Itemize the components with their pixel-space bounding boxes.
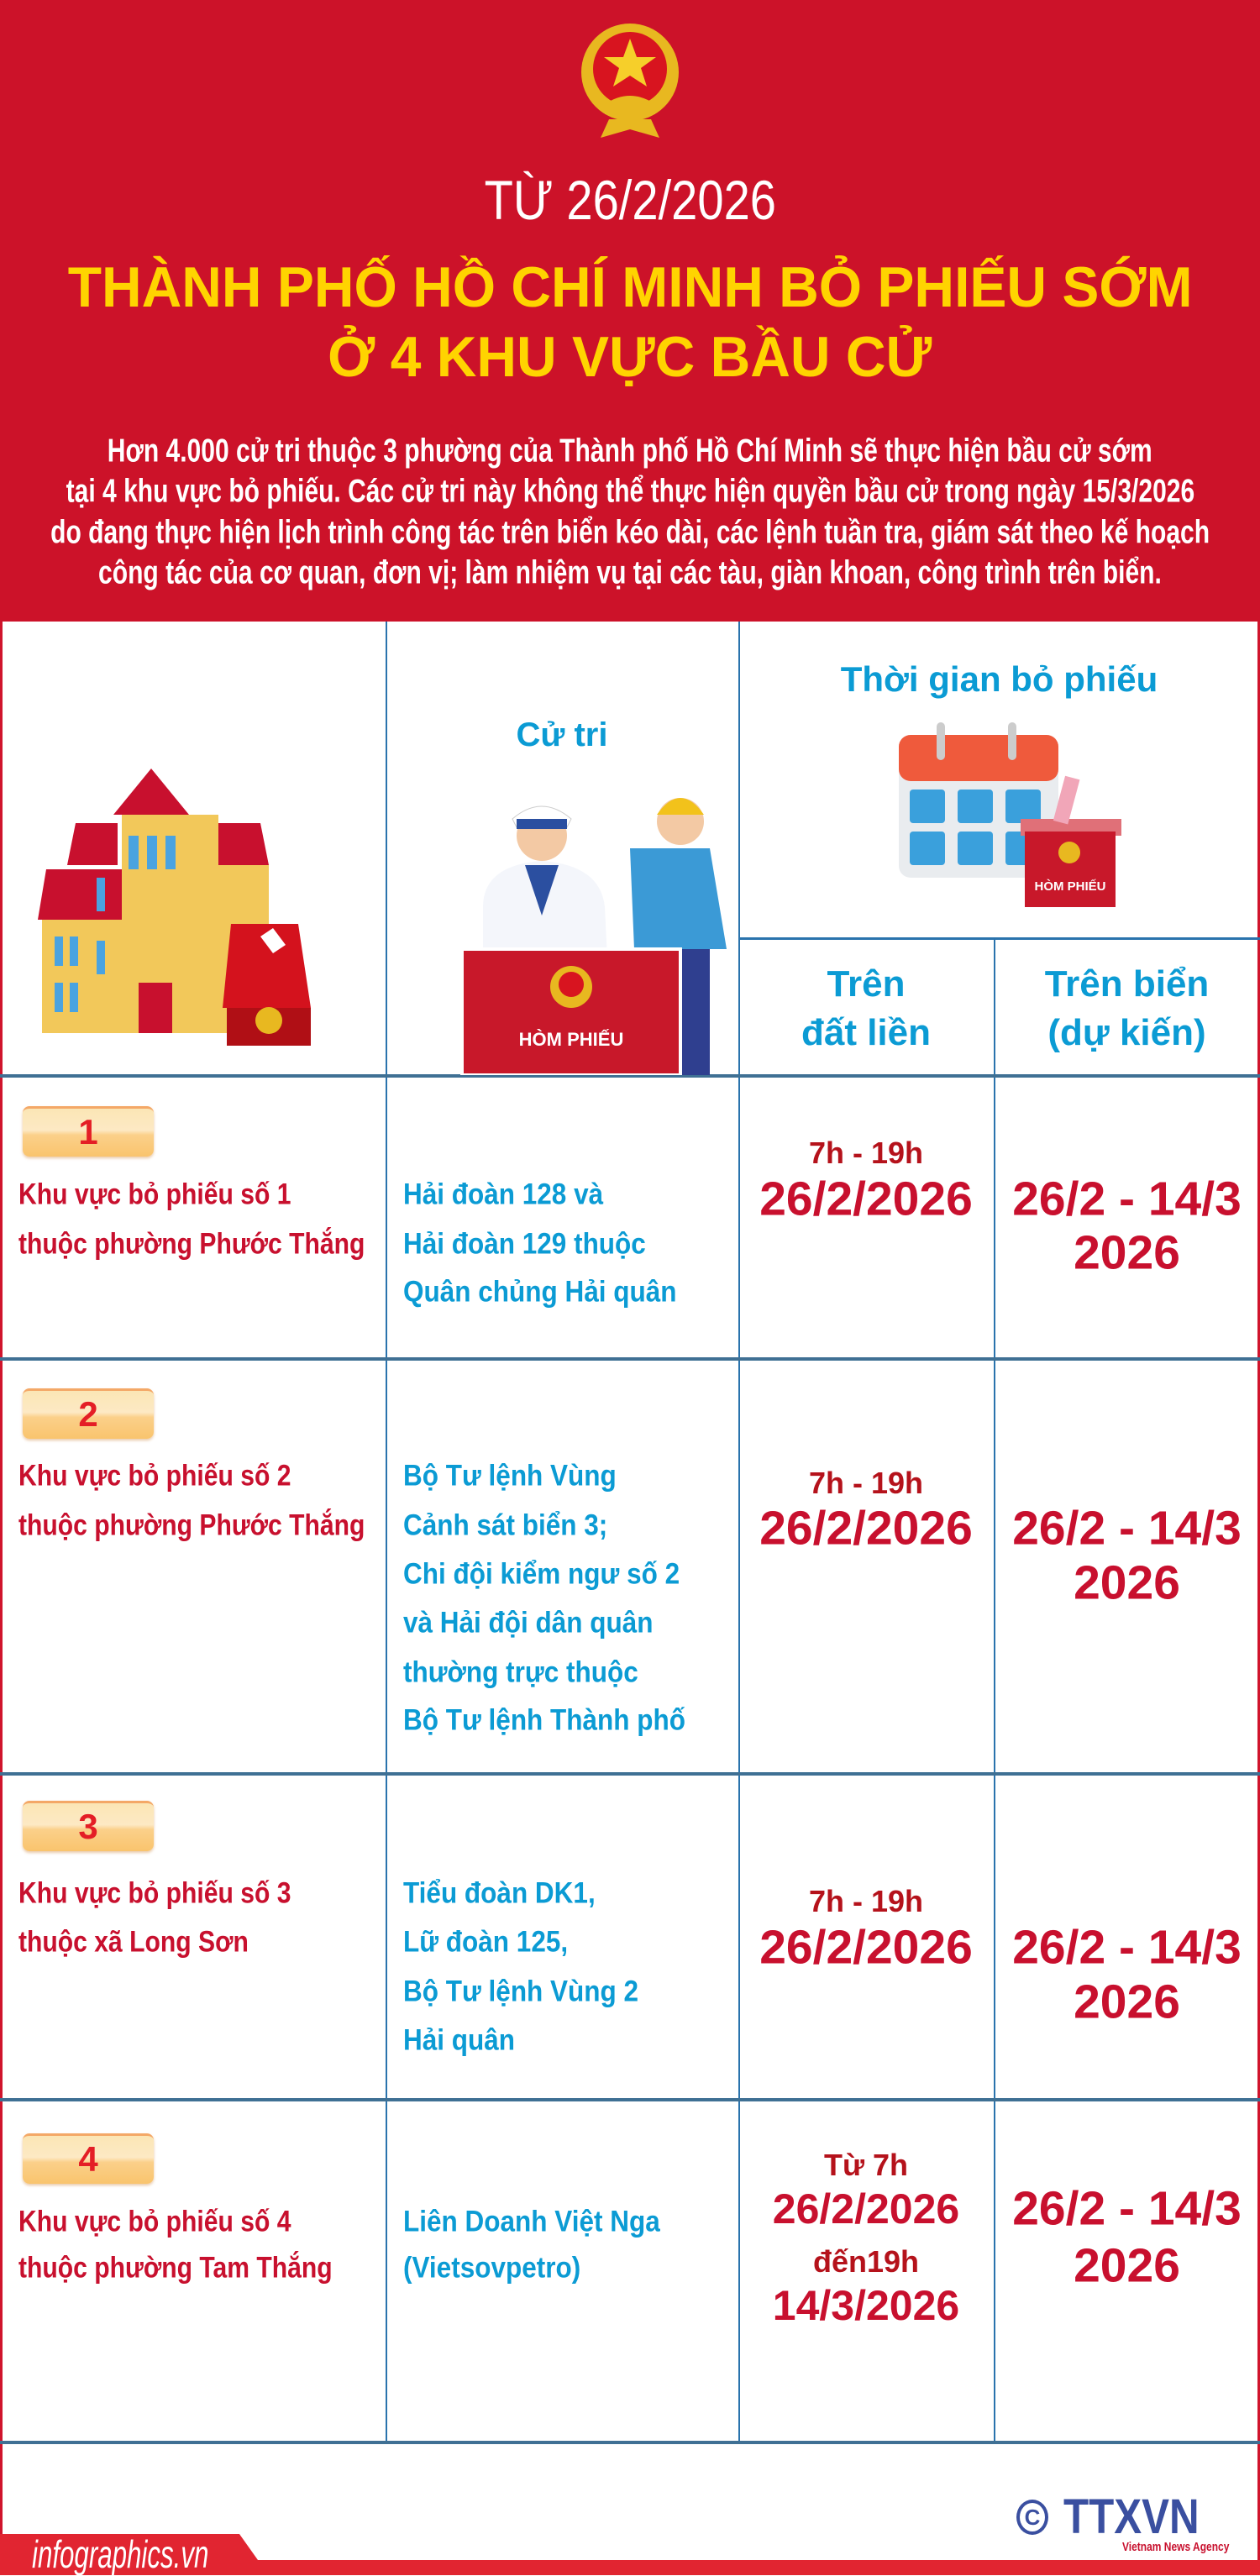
logo: TTXVN: C: [1025, 2505, 1040, 2530]
row 2: Cảnh sát biển 3;: [403, 1508, 607, 1542]
row 3: Lữ đoàn 125,: [403, 1925, 568, 1959]
row 3: 26/2 - 14/3: [1012, 1920, 1242, 1974]
row 3: [18, 1801, 1242, 2056]
row 2: 26/2 - 14/3: [1012, 1502, 1242, 1556]
logo: TTXVN: TTXVN: [1063, 2489, 1200, 2544]
header: Thời gian bỏ phiếu: Thời gian bỏ phiếu: [841, 659, 1158, 699]
row 2: Bộ Tư lệnh Thành phố: [403, 1703, 685, 1737]
row 3: thuộc xã Long Sơn: [18, 1925, 249, 1959]
badge 3: 3: [78, 1807, 98, 1846]
intro paragraph: tại 4 khu vực bỏ phiếu. Các cử tri này không thể thực hiện quyền bầu cử trong ngày 15/3/2026: [66, 474, 1194, 509]
intro paragraph: do đang thực hiện lịch trình công tác trên biển kéo dài, các lệnh tuần tra, giám sát theo kế hoạch: [50, 514, 1210, 551]
subheader: Trên đất liền: Trên: [827, 963, 905, 1005]
row 1: Hải đoàn 129 thuộc: [403, 1228, 646, 1260]
header: Cử tri: Cử tri: [517, 716, 607, 753]
subheader: Trên đất liền: đất liền: [801, 1012, 931, 1053]
row 1: thuộc phường Phước Thắng: [18, 1228, 365, 1260]
table frame: [0, 622, 1260, 2575]
subheader: Trên biển (dự kiến): Trên biển: [1045, 963, 1209, 1005]
badge 3: [23, 1801, 154, 1851]
header: red banner: [0, 0, 1260, 622]
badge 2: [23, 1388, 154, 1439]
title: THÀNH PHỐ HỒ CHÍ MINH BỎ PHIẾU SỚM: [68, 255, 1192, 319]
icon: voters with ballot box: HÒM PHIẾU: [519, 1029, 623, 1050]
row 3: Hải quân: [403, 2024, 515, 2056]
row 2: Khu vực bỏ phiếu số 2: [18, 1460, 291, 1492]
row 1: Khu vực bỏ phiếu số 1: [18, 1178, 291, 1211]
icon: calendar with ballot box: HÒM PHIẾU: [1034, 879, 1106, 894]
row 4: 14/3/2026: [773, 2282, 959, 2329]
row 2: [18, 1388, 1242, 1737]
icon: voters with ballot box: [460, 798, 727, 1075]
title: Ở 4 KHU VỰC BẦU CỬ: [328, 325, 932, 389]
badge 1: [23, 1106, 154, 1157]
row 3: Bộ Tư lệnh Vùng 2: [403, 1975, 638, 2007]
row 2: Bộ Tư lệnh Vùng: [403, 1460, 617, 1492]
footer: red bar with infographics.vn tab: [0, 2532, 1260, 2576]
row 2: 2026: [1074, 1556, 1180, 1609]
row 4: 2026: [1074, 2239, 1180, 2293]
badge 1: 1: [78, 1112, 98, 1152]
subheader: Trên biển (dự kiến): (dự kiến): [1047, 1012, 1206, 1053]
intro paragraph: [50, 433, 1210, 591]
badge 4: 4: [78, 2139, 98, 2179]
row 3: 2026: [1074, 1975, 1180, 2029]
row 1: Hải đoàn 128 và: [403, 1178, 603, 1211]
subheader: Trên biển (dự kiến): [1045, 963, 1209, 1053]
row 1: 7h - 19h: [809, 1136, 923, 1170]
row 4: đến19h: [813, 2244, 919, 2279]
row 1: Quân chủng Hải quân: [403, 1275, 677, 1309]
logo: TTXVN: Vietnam News Agency: [1122, 2540, 1229, 2554]
row 4: Khu vực bỏ phiếu số 4: [18, 2206, 291, 2238]
row 2: thuộc phường Phước Thắng: [18, 1508, 365, 1542]
badge 4: [23, 2133, 154, 2184]
icon: calendar with ballot box: [899, 722, 1121, 907]
row 4: 26/2 - 14/3: [1012, 2182, 1242, 2236]
intro paragraph: công tác của cơ quan, đơn vị; làm nhiệm vụ tại các tàu, giàn khoan, công trình trên biển.: [98, 554, 1162, 591]
icon: building with ballot box: [38, 769, 311, 1046]
row 2: và Hải đội dân quân: [403, 1606, 654, 1640]
row 4: 26/2/2026: [773, 2185, 959, 2232]
row 2: Chi đội kiểm ngư số 2: [403, 1557, 680, 1591]
logo: TTXVN: [1016, 2489, 1230, 2554]
intro paragraph: Hơn 4.000 cử tri thuộc 3 phường của Thành phố Hồ Chí Minh sẽ thực hiện bầu cử sớm: [108, 433, 1152, 469]
row 4: thuộc phường Tam Thắng: [18, 2251, 333, 2285]
row 4: Từ 7h: [824, 2148, 908, 2182]
row 4: (Vietsovpetro): [403, 2251, 580, 2285]
footer: red bar with infographics.vn tab: infographics.vn: [32, 2532, 208, 2576]
subtitle: date: TỪ 26/2/2026: [484, 169, 776, 231]
row 4: Liên Doanh Việt Nga: [403, 2206, 660, 2238]
row 2: 26/2/2026: [759, 1502, 973, 1556]
row 2: 7h - 19h: [809, 1466, 923, 1500]
icon: national emblem: [581, 24, 679, 138]
row 1: [18, 1106, 1242, 1309]
row 3: 7h - 19h: [809, 1884, 923, 1918]
row 1: 2026: [1074, 1226, 1180, 1280]
row 4: [18, 2133, 1242, 2329]
row 3: 26/2/2026: [759, 1920, 973, 1974]
row 2: thường trực thuộc: [403, 1656, 638, 1688]
row 3: Khu vực bỏ phiếu số 3: [18, 1876, 291, 1910]
row 1: 26/2 - 14/3: [1012, 1173, 1242, 1226]
badge 2: 2: [78, 1394, 98, 1434]
title: [68, 255, 1192, 389]
subheader: Trên đất liền: [801, 963, 931, 1053]
row 3: Tiểu đoàn DK1,: [403, 1876, 596, 1910]
row 1: 26/2/2026: [759, 1173, 973, 1226]
